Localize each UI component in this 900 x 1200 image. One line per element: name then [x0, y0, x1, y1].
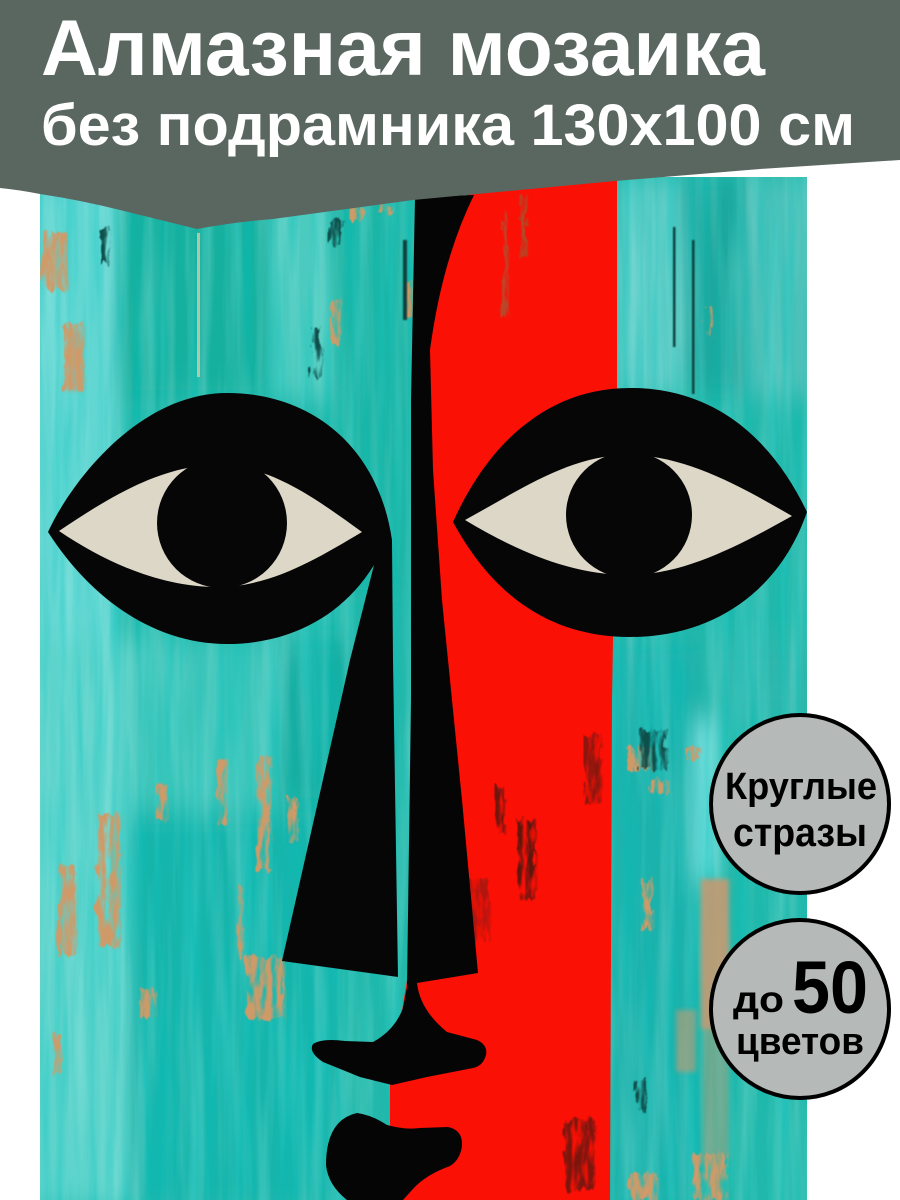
- painting: teal background: [40, 177, 807, 1200]
- right eye pupil: [566, 452, 692, 578]
- painting: solid tan block: [44, 236, 729, 1159]
- right eye white: [465, 455, 792, 575]
- banner: header shape: [0, 0, 900, 229]
- painting: red band marks: [470, 195, 601, 1190]
- icon: right eye: [453, 388, 807, 637]
- panel: painting: [30, 177, 815, 1200]
- left eye lens and nose wedge: [48, 393, 398, 977]
- title: Алмазная мозаика: [41, 3, 766, 92]
- painting: dark scratches: [102, 220, 667, 1110]
- badge: up to 50 colours: 50: [792, 946, 868, 1029]
- painting: pale vertical line: [197, 233, 200, 377]
- badge: round rhinestones: стразы: [733, 811, 867, 855]
- badge: round rhinestones: Круглые: [725, 766, 877, 808]
- icon: left eye: [48, 393, 398, 977]
- badge: up to 50 colours: цветов: [736, 1021, 864, 1063]
- painting: lower lip: [326, 1113, 462, 1200]
- painting: red band: [390, 177, 617, 1200]
- painting: rust patches: [43, 204, 727, 1200]
- painting: central nose strip: [312, 195, 486, 1085]
- painting: broad paint bands: [30, 177, 815, 1200]
- left eye pupil: [157, 458, 287, 588]
- badge: up to 50 colours: до: [733, 979, 784, 1020]
- left eye white: [59, 465, 362, 587]
- right eye lens: [453, 388, 807, 637]
- subtitle: без подрамника 130х100 см: [41, 93, 855, 158]
- badge: up to 50 colours: [711, 920, 889, 1098]
- badge: round rhinestones: [711, 715, 889, 893]
